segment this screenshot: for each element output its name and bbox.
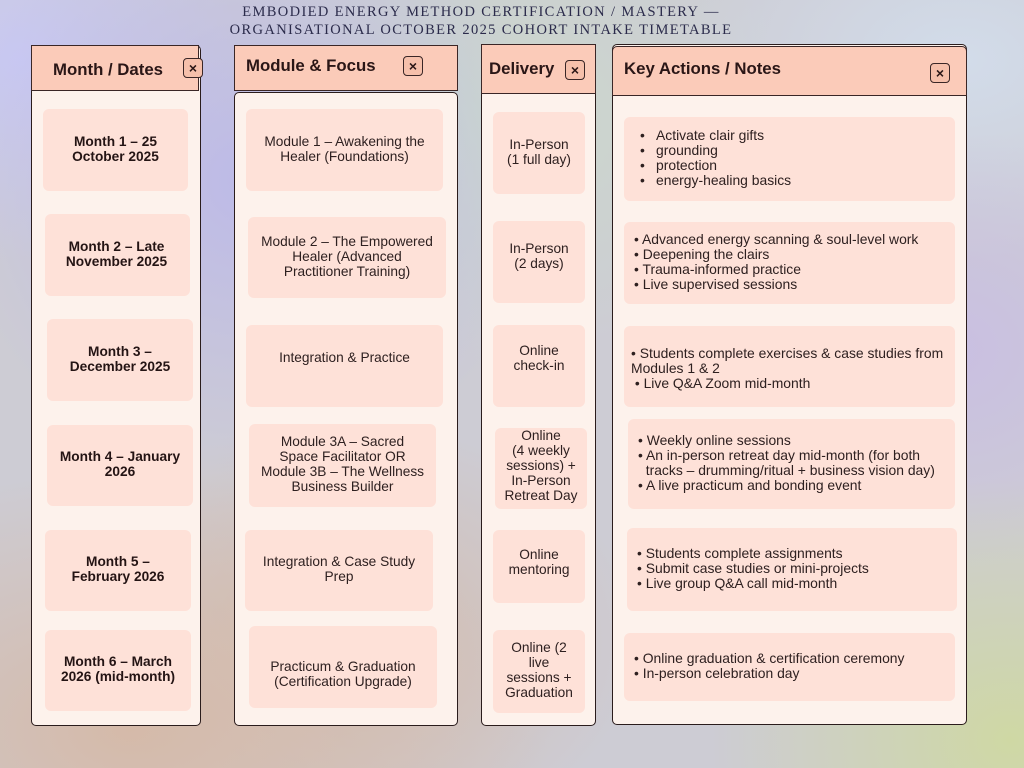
header: key actions (612, 46, 967, 96)
cell: delivery 4: (4 weekly (512, 443, 570, 458)
title: EMBODIED ENERGY METHOD CERTIFICATION / MASTERY — (242, 4, 720, 20)
cell: practicum: Practicum & Graduation (270, 659, 416, 674)
cell: actions 4: tracks – drumming/ritual + business vision day) (646, 462, 935, 478)
cell: delivery 6: Graduation (505, 684, 573, 700)
cell: module 3 (249, 424, 436, 507)
cell: module 3: Business Builder (292, 478, 393, 494)
icon: close delivery: × (571, 62, 579, 78)
header: module & focus (234, 45, 458, 91)
cell: month 1: October 2025 (72, 149, 159, 164)
cell: actions 2: • Advanced energy scanning & soul-level work (634, 231, 918, 247)
cell: month 4 (47, 425, 193, 506)
header: month / dates: Month / Dates (53, 60, 163, 79)
icon: close month (183, 58, 203, 78)
cell: actions 1: grounding (656, 142, 718, 158)
cell: delivery 5: mentoring (509, 562, 569, 576)
cell: practicum (249, 626, 437, 708)
cell: module 2: Module 2 – The Empowered (261, 234, 433, 249)
column body: actions (612, 44, 967, 725)
cell: module 3: Space Facilitator OR (279, 448, 406, 464)
cell: actions 1: protection (656, 157, 717, 173)
cell: actions 1: energy-healing basics (656, 172, 791, 188)
cell: delivery 6: Online (2 (511, 640, 567, 654)
cell: delivery 5: Online (519, 546, 559, 562)
cell: actions 5: • Submit case studies or mini-projects (637, 560, 869, 576)
cell: delivery 3 (493, 325, 585, 407)
column body: month (31, 45, 201, 726)
cell: month 5 (45, 530, 191, 611)
cell: module 2: Healer (Advanced (292, 249, 402, 264)
cell: actions 5: • Live group Q&A call mid-month (637, 575, 837, 591)
column body: delivery (481, 44, 596, 726)
cell: delivery 2: (2 days) (514, 256, 564, 271)
cell: case study prep (245, 530, 433, 611)
cell: actions 1: • (640, 157, 645, 173)
cell: delivery 5 (493, 530, 585, 603)
icon: close delivery (565, 60, 585, 80)
cell: module 1: Healer (Foundations) (280, 149, 409, 164)
cell: month 6: 2026 (mid-month) (61, 668, 175, 684)
icon: close actions: × (936, 65, 944, 81)
cell: month 3 (47, 319, 193, 401)
cell: module 1: Module 1 – Awakening the (264, 134, 425, 149)
cell: actions 3: Modules 1 & 2 (631, 360, 720, 376)
icon: close module (403, 56, 423, 76)
cell: delivery 4: In-Person (511, 473, 571, 488)
cell: actions 3: • Live Q&A Zoom mid-month (635, 375, 810, 391)
cell: delivery 3: check-in (514, 358, 564, 373)
icon: close actions (930, 63, 950, 83)
cell: delivery 1: (1 full day) (507, 152, 571, 167)
title (230, 4, 732, 38)
cell: actions 4: • A live practicum and bonding event (638, 477, 861, 493)
cell: actions 6 (624, 633, 955, 701)
icon: close module: × (409, 58, 417, 74)
cell: month 5: Month 5 – (86, 554, 150, 568)
column body: module (234, 92, 458, 726)
cell: month 2 (45, 214, 190, 296)
title: ORGANISATIONAL OCTOBER 2025 COHORT INTAKE TIMETABLE (230, 22, 732, 38)
cell: delivery 4: sessions) + (506, 458, 576, 473)
cell: month 4: Month 4 – January (60, 448, 180, 464)
cell: actions 4: • Weekly online sessions (638, 432, 791, 448)
cell: month 1: Month 1 – 25 (74, 134, 157, 149)
cell: actions 6: • Online graduation & certification ceremony (634, 650, 904, 666)
header: month / dates (31, 45, 199, 91)
cell: delivery 4: Online (521, 428, 561, 443)
cell: month 1 (43, 109, 188, 191)
header: key actions: Key Actions / Notes (624, 59, 781, 78)
cell: month 2: Month 2 – Late (69, 239, 164, 254)
cell: actions 6: • In-person celebration day (634, 665, 799, 681)
icon: close month: × (189, 60, 197, 76)
cell: delivery 4: Retreat Day (504, 488, 578, 503)
cell: actions 1: • (640, 142, 645, 158)
cell: delivery 6: live (529, 654, 549, 670)
cell: delivery 2 (493, 221, 585, 303)
header: module & focus: Module & Focus (246, 56, 376, 75)
cell: actions 1: • (640, 172, 645, 188)
cell: month 3: Month 3 – (88, 344, 152, 359)
cell: module 1 (246, 109, 443, 191)
cell: delivery 6 (493, 630, 585, 713)
cell: actions 5 (627, 528, 957, 611)
cell: actions 1 (624, 117, 955, 201)
cell: actions 4: • An in-person retreat day mid-month (for both (638, 447, 920, 463)
cell: module 2: Practitioner Training) (284, 264, 410, 279)
cell: integration: Integration & Practice (279, 350, 410, 364)
cell: month 5: February 2026 (72, 568, 164, 584)
cell: delivery 6: sessions + (506, 670, 572, 684)
cell: month 4: 2026 (105, 464, 135, 478)
header: delivery: Delivery (489, 59, 554, 78)
cell: actions 3: • Students complete exercises & case studies from (631, 345, 943, 361)
cell: integration (246, 325, 443, 407)
cell: actions 1: • (640, 127, 645, 143)
cell: actions 1: Activate clair gifts (656, 127, 764, 143)
cell: practicum: (Certification Upgrade) (274, 674, 412, 689)
cell: delivery 2: In-Person (509, 241, 569, 256)
cell: actions 2 (624, 222, 955, 304)
cell: module 3: Module 3B – The Wellness (261, 464, 424, 478)
cell: actions 2: • Trauma-informed practice (634, 261, 801, 277)
cell: module 3: Module 3A – Sacred (281, 434, 404, 448)
cell: actions 4 (628, 419, 955, 509)
cell: actions 2: • Live supervised sessions (634, 276, 797, 292)
panel: delivery column (481, 44, 596, 726)
cell: module 2 (248, 217, 446, 298)
cell: month 6 (45, 630, 191, 711)
cell: delivery 1 (493, 112, 585, 194)
cell: delivery 4 (495, 428, 587, 509)
cell: case study prep: Prep (325, 568, 353, 584)
cell: actions 3 (624, 326, 955, 407)
header: delivery (481, 44, 596, 94)
cell: delivery 1: In-Person (509, 137, 569, 152)
cell: month 6: Month 6 – March (64, 654, 172, 668)
cell: actions 5: • Students complete assignments (637, 545, 843, 561)
panel: key actions column (612, 44, 967, 725)
cell: month 2: November 2025 (66, 254, 167, 269)
panel: month / dates column (31, 45, 203, 726)
cell: month 3: December 2025 (70, 359, 170, 374)
cell: case study prep: Integration & Case Study (263, 554, 415, 568)
panel: module & focus column (234, 45, 458, 726)
cell: delivery 3: Online (519, 343, 559, 358)
cell: actions 2: • Deepening the clairs (634, 246, 769, 262)
